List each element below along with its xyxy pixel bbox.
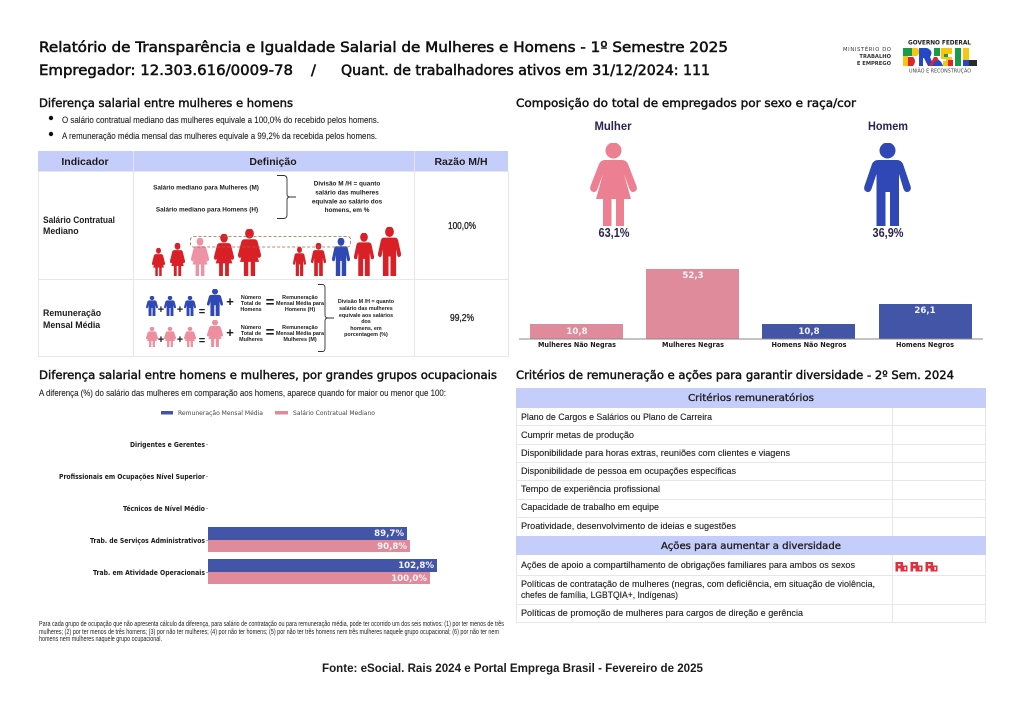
table header	[61, 156, 488, 168]
bullets	[49, 115, 379, 142]
figure: mulher: Mulher	[594, 119, 632, 133]
heading: composição: Composição do total de empregados por sexo e raça/cor	[516, 96, 856, 110]
table: critérios e ações: Políticas de promoção de mulheres para cargos de direção e gerência	[521, 607, 804, 618]
bar chart: sexo e raça: Mulheres Não Negras	[538, 340, 616, 349]
logo: ministério do trabalho e emprego: TRABALHO	[859, 54, 892, 60]
legend: Salário Contratual Mediano	[293, 409, 375, 417]
bar chart: sexo e raça	[519, 269, 983, 349]
definição: remuneração média: salário das mulheres	[339, 306, 393, 312]
logo: governo federal brasil	[903, 40, 977, 74]
definição: remuneração média: Homens	[240, 307, 262, 313]
title: Quant. de trabalhadores ativos em 31/12/2024: 111	[341, 63, 710, 79]
heading: diferença salarial: Diferença salarial entre mulheres e homens	[39, 96, 293, 110]
row label: salário contratual mediano: Mediano	[43, 226, 79, 236]
definição: salário mediano: salário das mulheres	[315, 190, 379, 196]
row label: salário contratual mediano	[43, 215, 115, 236]
title: Empregador: 12.303.616/0009-78	[39, 63, 293, 79]
bar chart: sexo e raça: 52,3	[682, 271, 704, 281]
logo: governo federal brasil: GOVERNO FEDERAL	[908, 40, 971, 46]
value: razão remuneração: 99,2%	[450, 313, 474, 324]
table header: Razão M/H	[434, 156, 488, 168]
row label: salário contratual mediano: Salário Contratual	[43, 215, 115, 225]
heading: grupos ocupacionais: Diferença salarial entre homens e mulheres, por grandes grupos ocupacionais	[39, 368, 497, 382]
people: média: +	[226, 325, 234, 340]
bar chart: grupos ocupacionais: Técnicos de Nível Médio	[123, 504, 205, 513]
bar chart: grupos ocupacionais: Dirigentes e Gerentes	[130, 440, 205, 449]
legend: Remuneração Mensal Média	[178, 409, 263, 417]
figure: mulher: 63,1%	[598, 226, 630, 240]
logo: ministério do trabalho e emprego	[843, 45, 892, 67]
title	[39, 40, 728, 79]
definição: remuneração média: Mensal Média para	[276, 301, 325, 307]
definição: remuneração média: Homens (H)	[285, 307, 315, 313]
heading: critérios: Critérios de remuneração e ações para garantir diversidade - 2º Sem. 2024	[516, 368, 954, 382]
people: mediana	[152, 226, 401, 276]
table: critérios e ações	[516, 388, 986, 622]
table: critérios e ações: Plano de Cargos e Salários ou Plano de Carreira	[521, 411, 713, 422]
bar chart: grupos ocupacionais: 89,7%	[374, 529, 404, 539]
header: critérios remuneratórios: Critérios remuneratórios	[688, 392, 814, 404]
people: média: =	[199, 335, 205, 347]
bar chart: grupos ocupacionais: Trab. em Atividade Operacionais	[93, 568, 205, 577]
table: indicadores	[38, 151, 508, 357]
table: critérios e ações: Tempo de experiência profissional	[521, 483, 660, 494]
people: média: +	[177, 304, 183, 316]
definição: salário mediano	[153, 176, 383, 218]
bullets: O salário contratual mediano das mulheres equivale a 100,0% do recebido pelos homens.	[62, 115, 379, 126]
definição: remuneração média: Número	[241, 325, 262, 331]
definição: remuneração média: equivale aos salários	[339, 313, 393, 319]
logo: ministério do trabalho e emprego: MINISTÉRIO DO	[843, 45, 891, 53]
bar chart: grupos ocupacionais: Profissionais em Ocupações Nível Superior	[59, 472, 205, 481]
figure: homem	[864, 119, 911, 240]
table: critérios e ações: Capacidade de trabalho em equipe	[521, 501, 659, 512]
footnote	[39, 621, 504, 643]
bar chart: grupos ocupacionais	[59, 440, 437, 584]
bar chart: sexo e raça: Homens Não Negros	[772, 340, 846, 349]
bar chart: sexo e raça: Mulheres Negras	[662, 340, 724, 349]
definição: remuneração média: Total de	[241, 331, 261, 337]
definição: salário mediano: Salário mediano para Mulheres (M)	[153, 184, 259, 192]
definição: remuneração média: Mulheres (M)	[283, 337, 317, 343]
bar chart: grupos ocupacionais: Trab. de Serviços Administrativos	[90, 536, 205, 545]
table: critérios e ações: Ações de apoio a compartilhamento de obrigações familiares para ambos os sexos	[521, 559, 855, 570]
figure: homem: 36,9%	[872, 226, 904, 240]
definição: remuneração média: Remuneração	[282, 295, 319, 301]
table: critérios e ações: Cumprir metas de produção	[521, 429, 634, 440]
definição: remuneração média: Remuneração	[282, 325, 319, 331]
header: ações para aumentar a diversidade: Ações para aumentar a diversidade	[661, 541, 841, 552]
definição: remuneração média: Total de	[241, 301, 261, 307]
header: critérios remuneratórios	[516, 388, 986, 408]
logo: governo federal brasil: UNIÃO E RECONSTRUÇÃO	[909, 68, 971, 74]
footnote: Para cada grupo de ocupação que não apresenta cálculo da diferença, para salário de contratação ou para remuneração média, pode ter ocorrido um dos seis motivos: (1) por ter menos de três	[39, 621, 504, 628]
people: média: =	[266, 324, 275, 341]
table: critérios e ações: chefes de família, LGBTQIA+, Indígenas)	[521, 589, 678, 600]
definição: salário mediano: homens, em %	[325, 207, 370, 214]
text: nota do gráfico: A diferença (%) do salário das mulheres em comparação aos homens, aparece quando for maior ou menor que 100:	[39, 388, 446, 399]
definição: remuneração média: Divisão M /H = quanto	[338, 299, 395, 305]
bar chart: sexo e raça: 10,8	[566, 327, 588, 337]
table: critérios e ações: Disponibilidade para horas extras, reuniões com clientes e viagens	[521, 447, 790, 458]
footnote: homens nem mulheres naquele grupo ocupacional.	[39, 636, 162, 643]
people: média: +	[177, 334, 183, 346]
people: média: +	[158, 304, 164, 316]
bar chart: grupos ocupacionais: 90,8%	[377, 542, 407, 552]
definição: salário mediano: equivale ao salário dos	[312, 198, 383, 206]
header: ações para aumentar a diversidade	[516, 536, 986, 555]
people: média	[146, 289, 275, 347]
footnote: mulheres; (2) por ter menos de três homens; (3) por não ter mulheres; (4) por não ter homens; (5) por não ter três homens nem três mulheres naquele grupo ocupacional; (6) por não ter nem	[39, 629, 499, 636]
legend	[161, 409, 375, 417]
title: Relatório de Transparência e Igualdade Salarial de Mulheres e Homens - 1º Semestre 2025	[39, 40, 728, 56]
value: razão salário contratual: 100,0%	[448, 221, 476, 232]
table header: Indicador	[61, 156, 109, 168]
definição: remuneração média: Mensal Média para	[276, 331, 325, 337]
definição: remuneração média: porcentagem (%)	[344, 332, 388, 338]
definição: remuneração média: dos	[361, 319, 371, 325]
table: critérios e ações: Disponibilidade de pessoa em ocupações específicas	[521, 465, 736, 476]
bar chart: grupos ocupacionais: 102,8%	[398, 561, 434, 571]
definição: salário mediano: Salário mediano para Homens (H)	[156, 206, 258, 214]
definição: remuneração média: Mulheres	[239, 337, 263, 343]
definição: remuneração média: homens, em	[350, 326, 382, 332]
table header: Definição	[249, 156, 297, 168]
bullets: A remuneração média mensal das mulheres equivale a 99,2% da recebida pelos homens.	[62, 131, 377, 142]
people: média: =	[266, 294, 275, 311]
figure: mulher	[590, 119, 637, 240]
row label: remuneração mensal média: Mensal Média	[43, 320, 100, 330]
people: média: =	[199, 306, 205, 318]
table: critérios e ações: Políticas de contratação de mulheres (negras, com deficiência, em situação de violência,	[521, 578, 875, 589]
title: /	[311, 63, 316, 79]
definição: salário mediano: Divisão M /H = quanto	[314, 180, 380, 188]
bar chart: sexo e raça: 10,8	[798, 327, 820, 337]
bar chart: sexo e raça: 26,1	[914, 306, 936, 316]
bar chart: sexo e raça: Homens Negros	[896, 340, 954, 349]
definição: remuneração média: Número	[241, 295, 262, 301]
people: média: +	[226, 294, 234, 309]
row label: remuneração mensal média: Remuneração	[43, 308, 102, 318]
bar chart: grupos ocupacionais: 100,0%	[391, 574, 427, 584]
figure: homem: Homem	[868, 119, 908, 133]
icons: indicação de ação	[896, 562, 938, 572]
row label: remuneração mensal média	[43, 308, 102, 330]
logo: ministério do trabalho e emprego: E EMPREGO	[857, 61, 892, 67]
table: critérios e ações: Proatividade, desenvolvimento de ideias e sugestões	[521, 520, 736, 531]
people: média: +	[158, 334, 164, 346]
footer: fonte: Fonte: eSocial. Rais 2024 e Portal Emprega Brasil - Fevereiro de 2025	[322, 663, 704, 675]
definição: remuneração média	[239, 284, 395, 352]
